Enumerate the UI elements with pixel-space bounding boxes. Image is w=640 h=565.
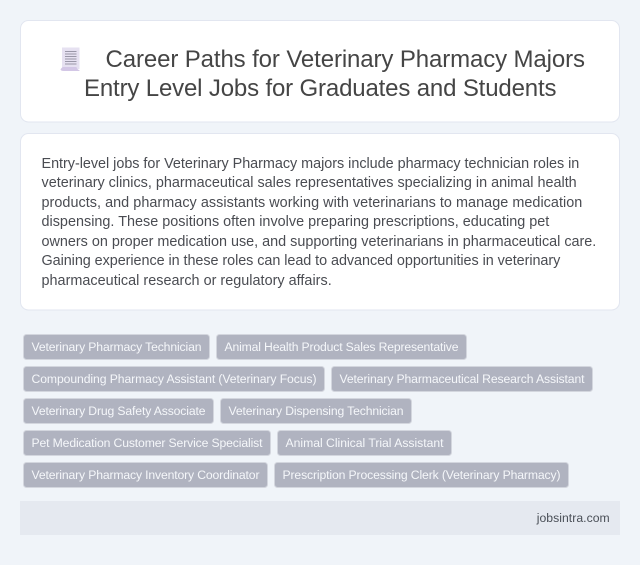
tag: Compounding Pharmacy Assistant (Veterinary Focus) [32,372,316,386]
tag: Animal Health Product Sales Representative [224,340,459,354]
title: Career Paths for Veterinary Pharmacy Majors [106,46,585,73]
tag [278,430,452,456]
tag [24,430,270,456]
footer bar [20,501,620,535]
text block: description: Entry-level jobs for Veterinary Pharmacy majors include pharmacy technician roles in [42,156,579,172]
text block: description: Gaining experience in these roles can lead to advanced opportunities in veterinary [42,253,561,269]
text block: description: dispensing. These positions often involve preparing prescriptions, educating pet [42,214,549,230]
footer text: jobsintra.com [536,511,610,525]
text block: description: veterinary clinics, pharmaceutical sales representatives specializing in animal health [42,175,577,191]
tag: Prescription Processing Clerk (Veterinary Pharmacy) [282,468,560,482]
text block: description: products, and pharmacy assistants working with veterinarians to manage medication [42,195,582,211]
tag [220,398,412,424]
panel: description card [20,134,620,310]
tag: Veterinary Drug Safety Associate [32,404,206,418]
title [84,46,585,102]
text block: description: pharmaceutical research or regulatory affairs. [42,273,332,289]
tag: Veterinary Pharmacy Technician [32,340,202,354]
tag: Veterinary Dispensing Technician [228,404,404,418]
tag: Veterinary Pharmacy Inventory Coordinator [32,468,260,482]
icon: receipt document [60,48,80,71]
panel: title card [20,20,620,122]
tag [216,334,466,360]
tag [332,366,592,392]
title: Entry Level Jobs for Graduates and Students [84,75,556,102]
tag [24,366,324,392]
tag list: entry level jobs [24,334,592,488]
text block: description [42,156,596,289]
tag [24,398,214,424]
tag: Animal Clinical Trial Assistant [286,436,444,450]
text block: description: owners on proper medication use, and supporting veterinarians in pharmaceutical care. [42,234,596,250]
tag [274,462,568,488]
tag [24,462,268,488]
tag: Veterinary Pharmaceutical Research Assistant [340,372,585,386]
tag: Pet Medication Customer Service Specialist [32,436,263,450]
tag [24,334,210,360]
